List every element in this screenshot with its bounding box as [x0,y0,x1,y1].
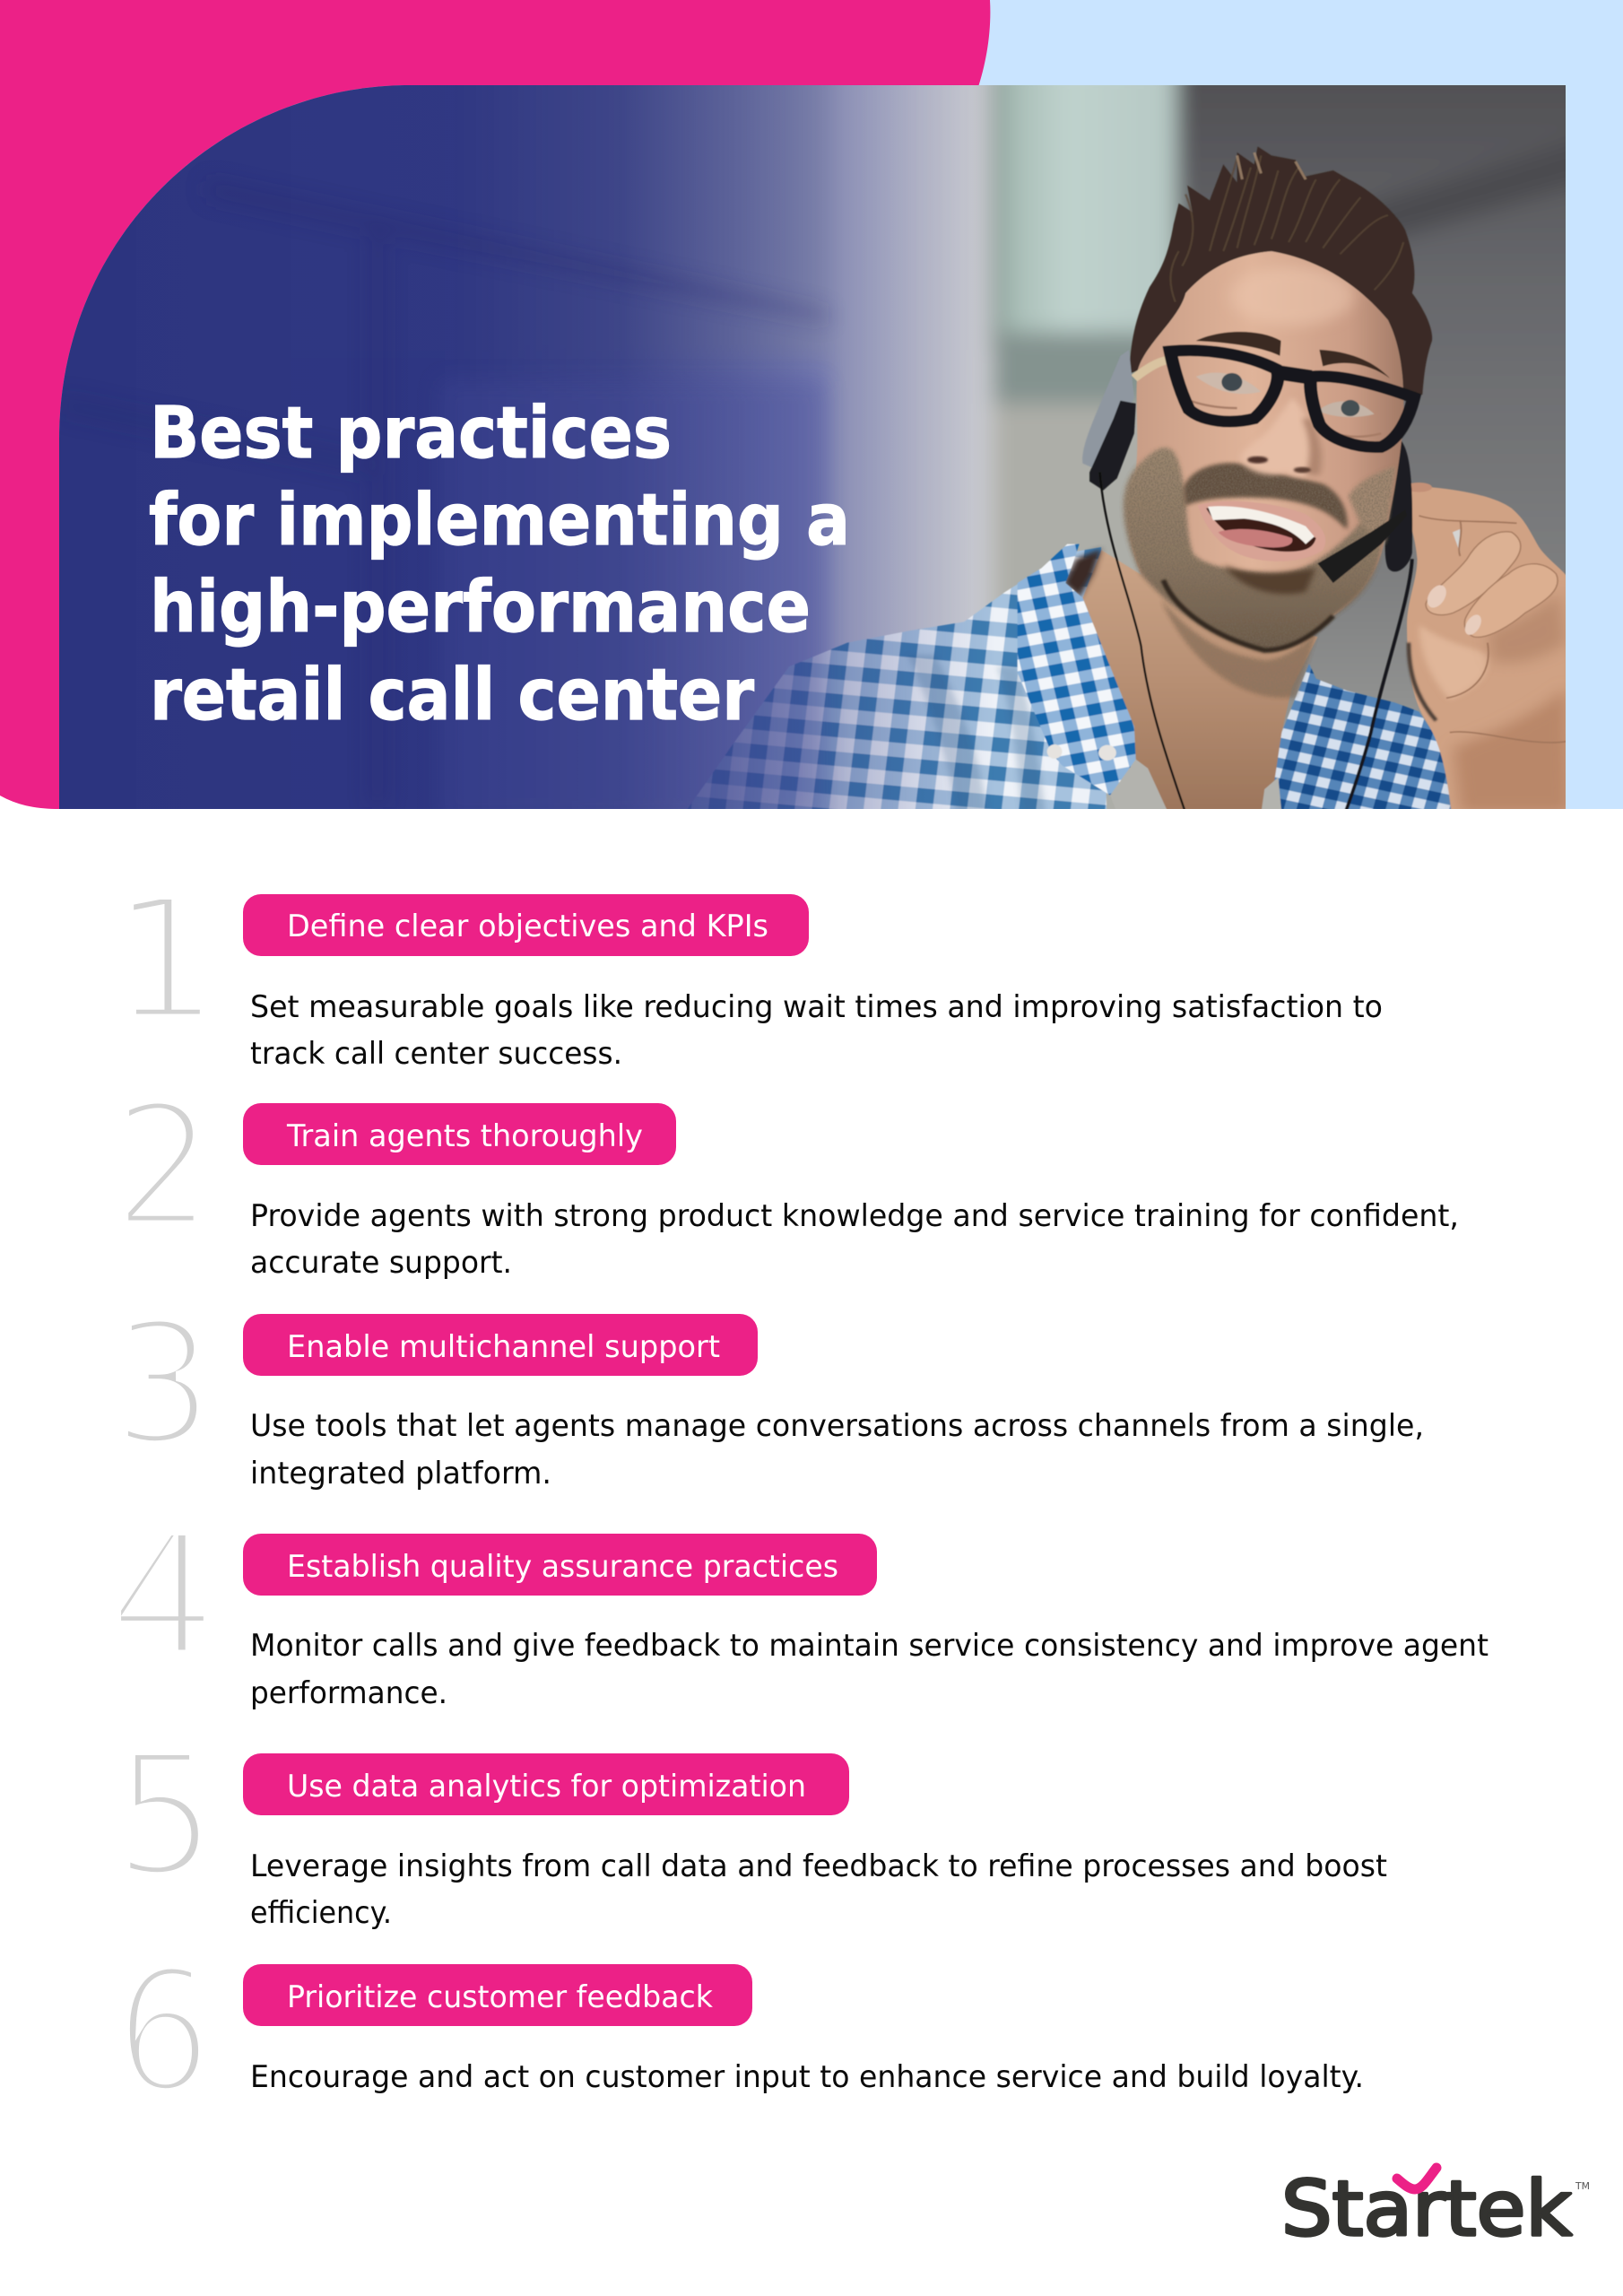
left earpiece [1082,350,1136,491]
title: for implementing a [149,479,850,561]
step 5 description: efficiency. [250,1895,392,1931]
step 6 [115,1932,1364,2131]
number 1: 1 [109,862,221,1059]
moustache [1184,464,1347,529]
hair [1129,146,1432,397]
step 4 description: Monitor calls and give feedback to maintain service consistency and improve agent [250,1628,1488,1664]
neck [1082,550,1318,813]
pill: step 1 heading [243,894,809,956]
face [1135,250,1405,615]
left cable [1100,473,1185,813]
eyebrows [1196,332,1390,378]
microphone boom [1318,509,1407,583]
jaw shadow line [1163,580,1333,650]
step 2 [112,1068,1459,1281]
step 4 description: performance. [250,1675,447,1711]
step 4 [108,1498,1488,1711]
header panel [0,0,1623,834]
hand [1404,483,1570,813]
step 2 description [250,1198,1459,1281]
pill: step 6 heading: Prioritize customer feedback [287,1979,713,2015]
photo background [36,63,1598,834]
light blue background block [897,0,1623,809]
mouth [1198,501,1325,561]
number 4: 4 [108,1498,218,1696]
eyes [1182,372,1381,437]
collar inner shadow [1063,549,1101,598]
number 2: 2 [112,1068,214,1265]
pill: step 2 heading [243,1103,676,1165]
number 6: 6 [115,1932,213,2131]
pill: step 5 heading: Use data analytics for optimization [287,1769,806,1805]
logo check mark [1397,2168,1436,2189]
trademark: TM [1575,2180,1590,2192]
pill: step 4 heading: Establish quality assurance practices [287,1549,838,1585]
shirt: seam shading [907,655,1045,813]
step 3 description [250,1408,1424,1492]
logo: Startek: Startek [1281,2165,1572,2254]
beard [1124,448,1381,652]
navy gradient overlay [36,63,1004,834]
title [149,392,850,736]
step 1 [109,862,1383,1072]
step 4 description [250,1628,1488,1711]
glasses [1134,351,1414,448]
step 3 description: Use tools that let agents manage conversations across channels from a single, [250,1408,1424,1444]
step 5 description: Leverage insights from call data and feedback to refine processes and boost [250,1848,1387,1884]
forehead highlight [1230,266,1354,326]
pill: step 1 heading: Define clear objectives and KPIs [287,909,768,944]
agent figure [685,146,1570,813]
right cheek stubble [1349,466,1395,544]
shirt buttons [1047,744,1116,761]
pill: step 6 heading [243,1964,752,2026]
chin tuft [1223,565,1316,594]
pink background shape [0,0,990,809]
pill: step 4 heading [243,1534,877,1596]
shirt: right shoulder [1261,664,1456,813]
title: retail call center [150,654,754,736]
step 2 description: Provide agents with strong product knowledge and service training for confident, [250,1198,1459,1234]
step 3 [111,1285,1424,1492]
shirt collar [1018,544,1136,796]
shirt: left shoulder [685,547,1107,813]
step 1 description: Set measurable goals like reducing wait times and improving satisfaction to [250,989,1383,1025]
pill: step 2 heading: Train agents thoroughly [286,1118,643,1154]
step 1 description [250,989,1383,1072]
right earpiece [1385,433,1412,571]
step 2 description: accurate support. [250,1245,512,1281]
step 5 description [250,1848,1387,1931]
step 6 description: Encourage and act on customer input to enhance service and build loyalty. [250,2059,1364,2095]
number 3: 3 [111,1285,214,1483]
step 3 description: integrated platform. [250,1456,551,1492]
step 1 description: track call center success. [250,1036,622,1072]
pink left band [0,0,269,796]
hero photo of smiling call center agent with headset [36,63,1598,834]
right cable [1345,559,1412,813]
undershirt [1110,760,1281,813]
title: Best practices [150,392,672,474]
title: high-performance [150,566,811,648]
number 5: 5 [113,1717,217,1915]
pill: step 3 heading: Enable multichannel support [287,1329,720,1365]
neck stubble shadow [1161,601,1316,697]
pill: step 3 heading [243,1314,758,1376]
pill: step 5 heading [243,1753,849,1815]
step 5 [113,1717,1387,1931]
nose [1240,397,1323,476]
blurred wall shapes [59,179,829,821]
